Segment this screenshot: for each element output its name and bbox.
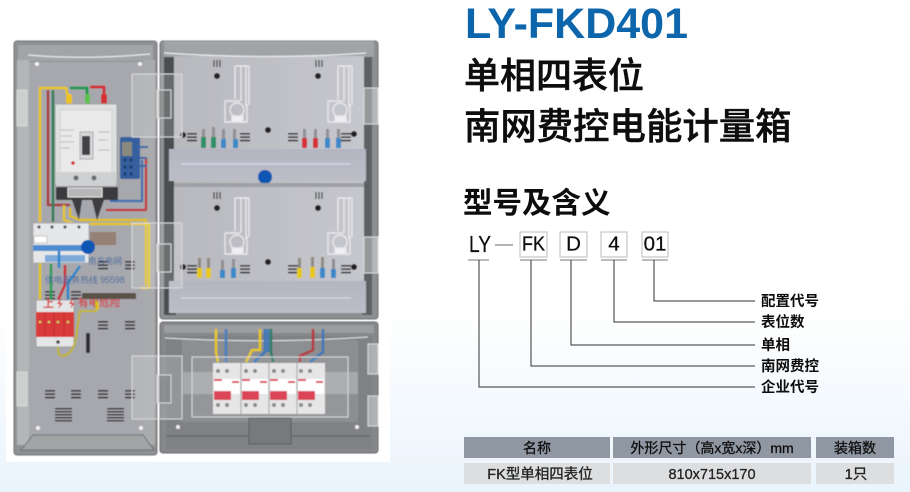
product photo: meter box — [14, 41, 378, 455]
table header: 名称 — [523, 440, 551, 456]
blue terminal block — [120, 137, 148, 179]
table header — [464, 437, 894, 458]
meaning labels: 配置代号 — [761, 293, 819, 310]
upper tray cover — [169, 149, 366, 181]
surge protector — [36, 300, 74, 347]
incoming wires — [216, 329, 323, 362]
title: LY-FKD401 — [465, 0, 688, 48]
subtitle line 2: 南网费控电能计量箱 — [464, 106, 792, 147]
model code diagram — [468, 231, 819, 396]
meaning labels: 企业代号 — [761, 378, 819, 396]
din breakers — [213, 363, 325, 414]
wiring and distribution bars — [40, 87, 149, 288]
leader lines — [468, 260, 755, 387]
lower tray cover — [169, 281, 366, 313]
upper meter bay — [180, 60, 357, 148]
code letters — [469, 231, 668, 257]
blue knob — [81, 240, 95, 254]
notice text: hotline: 供电服务热线 95598 — [45, 274, 125, 285]
divider knob — [258, 170, 272, 184]
notice text: China Southern Power Grid: 南方电网 — [88, 256, 122, 266]
code letters: 4 — [608, 232, 620, 256]
table row: 810x715x170 — [668, 467, 756, 483]
main circuit breaker — [55, 104, 118, 220]
terminal tips on breaker — [66, 94, 107, 106]
section heading: 型号及含义 — [463, 187, 611, 220]
transparent window — [192, 357, 348, 417]
code letters: 01 — [644, 232, 666, 256]
danger warning text 2: 有电危险 — [78, 296, 121, 309]
distribution breaker — [33, 223, 116, 263]
specification table — [464, 437, 894, 484]
table header: 外形尺寸（高x宽x深）mm — [630, 440, 794, 456]
code letters: LY — [469, 231, 491, 257]
meaning labels: 南网费控 — [761, 357, 819, 375]
right lower cabinet — [160, 322, 378, 453]
left door panel — [14, 41, 157, 455]
subtitle line 1: 单相四表位 — [464, 55, 644, 96]
meaning labels — [761, 293, 819, 396]
earth bar and wire — [58, 293, 136, 356]
transparent latches — [17, 74, 378, 426]
code letters: D — [566, 232, 581, 256]
photo backing — [6, 30, 390, 462]
table header: 装箱数 — [834, 440, 876, 456]
meaning labels: 单相 — [761, 337, 790, 354]
lightning marks — [57, 298, 75, 309]
lower leads — [40, 250, 80, 300]
right upper cabinet — [160, 41, 378, 319]
danger warning text: 上 — [43, 297, 54, 310]
table row: FK型单相四表位 — [487, 466, 593, 483]
table row: 1只 — [845, 467, 867, 483]
meaning labels: 表位数 — [761, 313, 805, 331]
code letters: FK — [522, 232, 545, 256]
table row — [464, 463, 894, 484]
lower meter bay — [174, 183, 364, 278]
